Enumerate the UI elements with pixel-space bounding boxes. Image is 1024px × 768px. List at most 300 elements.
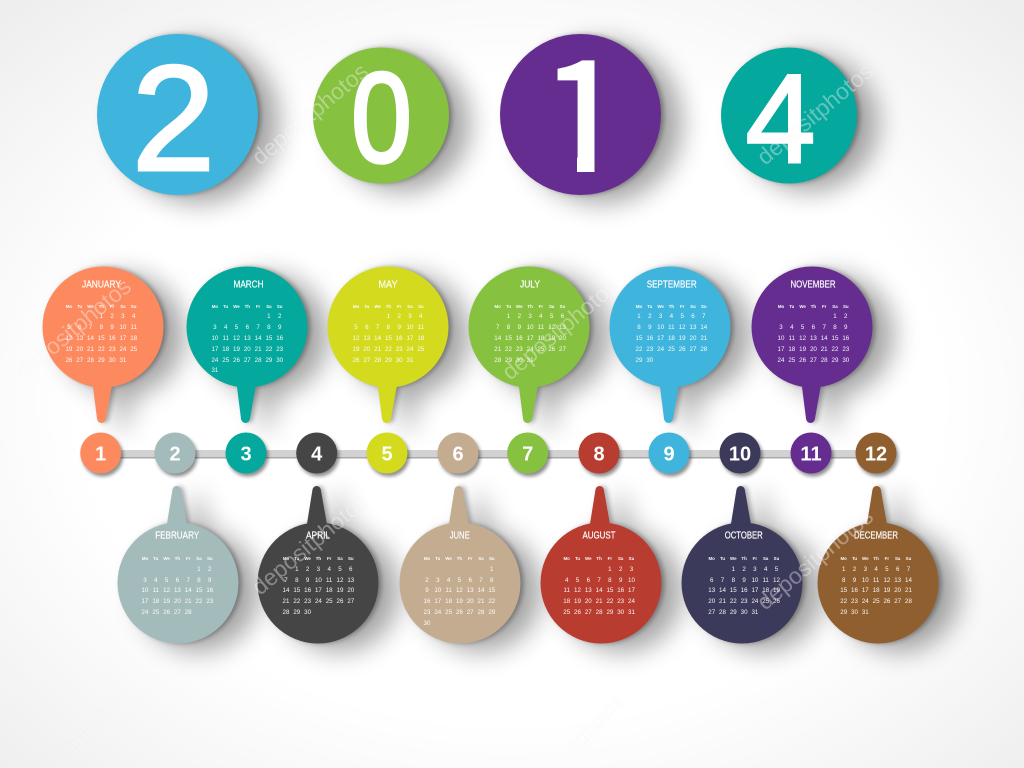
panel: october: Tu: [720, 556, 725, 561]
panel: december: Sa: [895, 556, 900, 561]
panel: december: We: [862, 556, 869, 561]
panel: october: 16: [741, 587, 748, 594]
digit circle: 0: 0: [351, 47, 412, 190]
panel: march: 21: [255, 346, 262, 353]
panel: june: 11: [445, 587, 452, 594]
panel: july: 3: [528, 313, 532, 320]
marker 12: [856, 432, 896, 474]
panel: august: 3: [630, 566, 633, 573]
panel: february: 17: [142, 598, 148, 605]
panel: december: Th: [873, 556, 879, 561]
panel: february: [118, 484, 269, 666]
panel: april: 1: [295, 566, 299, 573]
panel: july: 23: [516, 346, 523, 353]
panel: march: Fr: [256, 304, 260, 309]
panel: august: 27: [585, 609, 592, 616]
panel: october: 2: [742, 566, 746, 573]
panel: may: 17: [407, 335, 413, 342]
panel: november: 7: [822, 324, 826, 331]
panel: december: 25: [873, 598, 880, 605]
panel: august: We: [585, 556, 592, 561]
panel: august: 13: [585, 587, 592, 594]
panel: may: 4: [419, 313, 422, 320]
panel: march: 3: [213, 324, 217, 331]
panel: january: 11: [130, 324, 137, 331]
panel: january: 1: [100, 313, 103, 320]
panel: december: Fr: [885, 556, 889, 561]
panel: june: [400, 484, 552, 666]
panel: january: 29: [98, 357, 105, 364]
panel: december: 19: [883, 587, 890, 594]
panel: october: 19: [773, 587, 780, 594]
panel: july: 28: [494, 357, 501, 364]
panel: january: 9: [110, 324, 114, 331]
panel: july: 11: [538, 324, 544, 331]
panel: july: Tu: [506, 304, 511, 309]
panel: july: 6: [561, 313, 564, 320]
panel: july: 17: [527, 335, 534, 342]
panel: may: 12: [353, 335, 359, 342]
panel: june: 6: [468, 577, 472, 584]
panel: november: Sa: [832, 304, 838, 309]
marker 9: 9: [663, 444, 675, 466]
panel: march: Tu: [223, 304, 228, 309]
panel: april: 29: [293, 609, 300, 616]
panel: august: 10: [628, 577, 635, 584]
panel: november: 21: [821, 346, 828, 353]
watermark: itphotos: [64, 691, 127, 757]
panel: february: 19: [163, 598, 170, 605]
panel: april: 3: [317, 566, 320, 573]
marker 3: 3: [240, 444, 252, 466]
panel: august: 29: [606, 609, 613, 616]
panel: october: 30: [741, 609, 748, 616]
panel: february: Mo: [142, 556, 148, 561]
panel: january: [42, 260, 196, 436]
panel: september: 2: [648, 313, 652, 320]
panel: march: 8: [267, 324, 271, 331]
panel: april: Sa: [337, 556, 343, 561]
panel: march: 26: [233, 357, 240, 364]
panel: august: 6: [587, 577, 590, 584]
panel: september: Mo: [636, 304, 642, 309]
panel: november: Th: [811, 304, 816, 309]
panel: july: 8: [507, 324, 510, 331]
panel: august: Sa: [618, 556, 623, 561]
panel: may: 8: [387, 324, 390, 331]
panel: february: 16: [206, 587, 213, 594]
panel: november: 30: [842, 357, 849, 364]
panel: february: 25: [152, 609, 159, 616]
panel: september: 20: [690, 335, 696, 342]
panel: march: 17: [211, 346, 218, 353]
panel: november: 9: [844, 324, 848, 331]
panel: january: Mo: [66, 304, 72, 309]
panel: july: 20: [559, 335, 566, 342]
panel: august: 14: [596, 587, 603, 594]
digit circle: 2: [97, 34, 258, 202]
panel: october: 9: [742, 577, 746, 584]
panel: october: 11: [762, 577, 769, 584]
panel: october: 23: [741, 598, 748, 605]
panel: october: 25: [762, 598, 769, 605]
panel: april: 26: [337, 598, 343, 605]
panel: may: Fr: [397, 304, 401, 309]
panel: march: 28: [255, 357, 262, 364]
panel: february: 26: [163, 609, 170, 616]
panel: may: 26: [353, 357, 359, 364]
panel: july: Sa: [549, 304, 554, 309]
panel: march: Th: [245, 304, 250, 309]
panel: january: 23: [109, 346, 116, 353]
panel: november: [752, 260, 908, 436]
panel: october: 28: [719, 609, 726, 616]
panel: march: 23: [276, 346, 283, 353]
panel: november: 28: [821, 357, 828, 364]
panel: july: 21: [494, 346, 501, 353]
panel: march: 24: [211, 357, 218, 364]
panel: november: 8: [833, 324, 837, 331]
panel: july: 2: [518, 313, 521, 320]
panel: june: Tu: [435, 556, 440, 561]
marker 1: 1: [95, 444, 106, 466]
panel: may: Mo: [353, 304, 359, 309]
panel: december: 3: [864, 566, 867, 573]
panel: june: 27: [467, 609, 474, 616]
panel: december: Mo: [841, 556, 847, 561]
panel: august: Th: [596, 556, 602, 561]
panel: february: 12: [163, 587, 170, 594]
panel: october: Sa: [763, 556, 768, 561]
panel: april: Su: [348, 556, 354, 561]
panel: april: 10: [315, 577, 322, 584]
panel: june: Fr: [468, 556, 472, 561]
panel: november: 17: [778, 346, 784, 353]
panel: july: 27: [559, 346, 566, 353]
digit circle: 0: [313, 47, 449, 190]
panel: september: 7: [702, 313, 706, 320]
panel: september: Su: [701, 304, 707, 309]
panel: april: 8: [295, 577, 299, 584]
panel: december: [818, 484, 974, 666]
panel: may: 31: [407, 357, 413, 364]
panel: august: 8: [608, 577, 612, 584]
panel: january: 25: [130, 346, 137, 353]
panel: may: MAY: [378, 278, 398, 290]
panel: october: 17: [751, 587, 758, 594]
panel: october: 13: [708, 587, 715, 594]
panel: february: 6: [176, 577, 179, 584]
panel: february: Su: [207, 556, 213, 561]
panel: march: 10: [211, 335, 218, 342]
panel: december: 8: [842, 577, 845, 584]
panel: september: 5: [680, 313, 684, 320]
panel: march: We: [233, 304, 240, 309]
panel: december: 30: [851, 609, 858, 616]
panel: september: 4: [670, 313, 673, 320]
panel: january: 7: [89, 324, 92, 331]
marker 11: 11: [800, 444, 822, 466]
panel: august: 22: [606, 598, 613, 605]
panel: august: 4: [565, 577, 568, 584]
panel: january: JANUARY: [82, 278, 120, 290]
panel: april: 12: [337, 577, 343, 584]
panel: december: Su: [906, 556, 911, 561]
panel: may: 3: [408, 313, 412, 320]
panel: october: 18: [762, 587, 769, 594]
panel: may: 24: [407, 346, 413, 353]
panel: november: NOVEMBER: [790, 278, 836, 290]
panel: september: Th: [669, 304, 674, 309]
panel: july: 10: [527, 324, 534, 331]
panel: november: 2: [844, 313, 848, 320]
panel: may: 28: [374, 357, 381, 364]
panel: november: 20: [810, 346, 817, 353]
panel: july: 7: [496, 324, 499, 331]
panel: june: Su: [489, 556, 495, 561]
panel: december: 6: [896, 566, 899, 573]
panel: november: 14: [821, 335, 828, 342]
panel: november: 10: [778, 335, 784, 342]
panel: may: 18: [417, 335, 424, 342]
panel: june: 17: [434, 598, 441, 605]
panel: september: 19: [679, 335, 686, 342]
panel: february: 7: [186, 577, 190, 584]
panel: july: 22: [505, 346, 512, 353]
panel: may: 23: [396, 346, 403, 353]
panel: june: 1: [490, 566, 494, 573]
panel: december: 27: [894, 598, 901, 605]
panel: march: 30: [276, 357, 283, 364]
panel: march: 29: [265, 357, 272, 364]
panel: october: 20: [708, 598, 715, 605]
panel: june: 23: [424, 609, 430, 616]
panel: may: Sa: [407, 304, 413, 309]
panel: june: 20: [467, 598, 474, 605]
panel: june: JUNE: [450, 530, 470, 542]
panel: may: 6: [365, 324, 369, 331]
marker 12: 12: [865, 444, 887, 466]
marker 4: 4: [311, 444, 323, 466]
watermark: depositphotos: [247, 58, 373, 170]
panel: february: 14: [185, 587, 192, 594]
panel: april: 18: [326, 587, 333, 594]
panel: february: 23: [206, 598, 213, 605]
panel: october: Th: [741, 556, 747, 561]
panel: april: 5: [338, 566, 342, 573]
panel: november: Tu: [789, 304, 794, 309]
panel: june: 29: [488, 609, 495, 616]
panel: november: 3: [779, 324, 783, 331]
panel: march: 27: [244, 357, 251, 364]
panel: february: 22: [196, 598, 202, 605]
panel: february: 20: [174, 598, 181, 605]
panel: may: 10: [407, 324, 413, 331]
panel: june: 8: [490, 577, 494, 584]
panel: april: 19: [337, 587, 343, 594]
panel: september: 30: [646, 357, 653, 364]
panel: august: 18: [563, 598, 570, 605]
panel: april: Mo: [283, 556, 289, 561]
panel: september: 27: [690, 346, 696, 353]
panel: april: [258, 484, 410, 666]
panel: december: Tu: [852, 556, 857, 561]
panel: december: 9: [853, 577, 856, 584]
panel: september: 13: [690, 324, 696, 331]
panel: october: 7: [721, 577, 724, 584]
marker 7: [507, 432, 548, 474]
panel: january: 24: [119, 346, 126, 353]
panel: january: 28: [87, 357, 94, 364]
marker 3: [226, 432, 266, 474]
panel: april: Th: [316, 556, 321, 561]
panel: october: 5: [775, 566, 778, 573]
panel: march: Mo: [212, 304, 218, 309]
marker 2: 2: [169, 444, 181, 466]
panel: february: 28: [185, 609, 192, 616]
panel: august: 30: [617, 609, 624, 616]
panel: january: 26: [65, 357, 72, 364]
watermark: depositphotos: [752, 503, 878, 615]
panel: may: Su: [418, 304, 424, 309]
panel: march: 20: [244, 346, 251, 353]
panel: december: 15: [840, 587, 847, 594]
panel: august: 25: [563, 609, 570, 616]
panel: april: 23: [304, 598, 311, 605]
panel: february: 9: [208, 577, 212, 584]
marker 8: 8: [593, 444, 605, 466]
watermark: depositphotos: [752, 58, 878, 170]
panel: july: 16: [516, 335, 523, 342]
panel: january: 21: [87, 346, 94, 353]
panel: november: 4: [790, 324, 794, 331]
panel: july: Th: [527, 304, 533, 309]
panel: december: 2: [853, 566, 856, 573]
panel: november: 13: [810, 335, 817, 342]
panel: august: [540, 484, 692, 666]
panel: march: [186, 260, 338, 436]
panel: september: 12: [679, 324, 686, 331]
panel: april: APRIL: [306, 530, 330, 542]
panel: november: We: [799, 304, 806, 309]
panel: november: 26: [799, 357, 806, 364]
panel: june: Mo: [424, 556, 430, 561]
panel: april: 6: [349, 566, 352, 573]
panel: september: 26: [679, 346, 686, 353]
panel: december: 22: [840, 598, 847, 605]
panel: august: 1: [608, 566, 612, 573]
panel: september: 29: [636, 357, 642, 364]
panel: december: 20: [894, 587, 901, 594]
panel: june: 3: [436, 577, 440, 584]
panel: august: 5: [576, 577, 579, 584]
panel: october: Su: [774, 556, 779, 561]
marker 5: [366, 432, 408, 474]
panel: february: 18: [152, 598, 159, 605]
panel: april: 22: [293, 598, 300, 605]
marker 10: [720, 432, 760, 474]
panel: december: 29: [840, 609, 847, 616]
panel: january: 31: [119, 357, 126, 364]
panel: june: 4: [447, 577, 450, 584]
panel: june: Th: [457, 556, 462, 561]
panel: march: 9: [278, 324, 281, 331]
panel: july: 26: [548, 346, 555, 353]
marker 4: [296, 432, 337, 474]
panel: august: 31: [628, 609, 635, 616]
panel: august: 15: [606, 587, 613, 594]
panel: december: 13: [894, 577, 901, 584]
marker 10: 10: [729, 444, 751, 466]
panel: july: 15: [505, 335, 512, 342]
year title 2014: [97, 26, 894, 218]
panel: november: 27: [810, 357, 817, 364]
panel: september: 6: [691, 313, 695, 320]
marker 6: 6: [452, 444, 464, 466]
panel: december: 23: [851, 598, 858, 605]
panel: march: 12: [233, 335, 240, 342]
panel: december: 18: [873, 587, 880, 594]
panel: april: 24: [315, 598, 322, 605]
panel: april: 30: [304, 609, 311, 616]
timeline 1 to 12: [80, 432, 901, 479]
panel: november: 11: [789, 335, 795, 342]
marker 7: 7: [522, 444, 533, 466]
panel: november: 5: [801, 324, 804, 331]
panel: march: 4: [224, 324, 227, 331]
marker 9: [648, 432, 690, 474]
panel: september: 21: [700, 335, 707, 342]
panel: july: 29: [505, 357, 512, 364]
panel: march: 11: [222, 335, 229, 342]
panel: february: 24: [142, 609, 148, 616]
panel: may: 29: [385, 357, 392, 364]
panel: january: 5: [67, 324, 71, 331]
panel: april: 11: [326, 577, 332, 584]
panel: september: 15: [636, 335, 642, 342]
panel: october: 21: [719, 598, 726, 605]
panel: november: 15: [832, 335, 838, 342]
panel: july: 31: [527, 357, 534, 364]
panel: january: 13: [76, 335, 83, 342]
panel: june: 24: [434, 609, 441, 616]
panel: october: Mo: [709, 556, 715, 561]
panel: august: 20: [585, 598, 592, 605]
panel: august: 17: [628, 587, 635, 594]
panel: february: Sa: [196, 556, 202, 561]
panel: august: 2: [619, 566, 622, 573]
panel: april: 21: [283, 598, 289, 605]
panel: january: 8: [100, 324, 103, 331]
panel: october: 14: [719, 587, 726, 594]
panel: september: 9: [648, 324, 652, 331]
panel: april: 9: [306, 577, 309, 584]
panel: may: 20: [363, 346, 370, 353]
panel: september: Tu: [647, 304, 652, 309]
panel: september: 25: [668, 346, 675, 353]
panel: november: 12: [799, 335, 806, 342]
panel: august: 9: [619, 577, 622, 584]
panel: february: 21: [185, 598, 192, 605]
panel: june: 12: [456, 587, 463, 594]
panel: december: 7: [907, 566, 910, 573]
panel: february: We: [163, 556, 170, 561]
panel: july: 5: [550, 313, 553, 320]
panel: may: 11: [418, 324, 424, 331]
panel: june: 15: [488, 587, 495, 594]
panel: june: 19: [456, 598, 463, 605]
panel: october: 15: [730, 587, 737, 594]
